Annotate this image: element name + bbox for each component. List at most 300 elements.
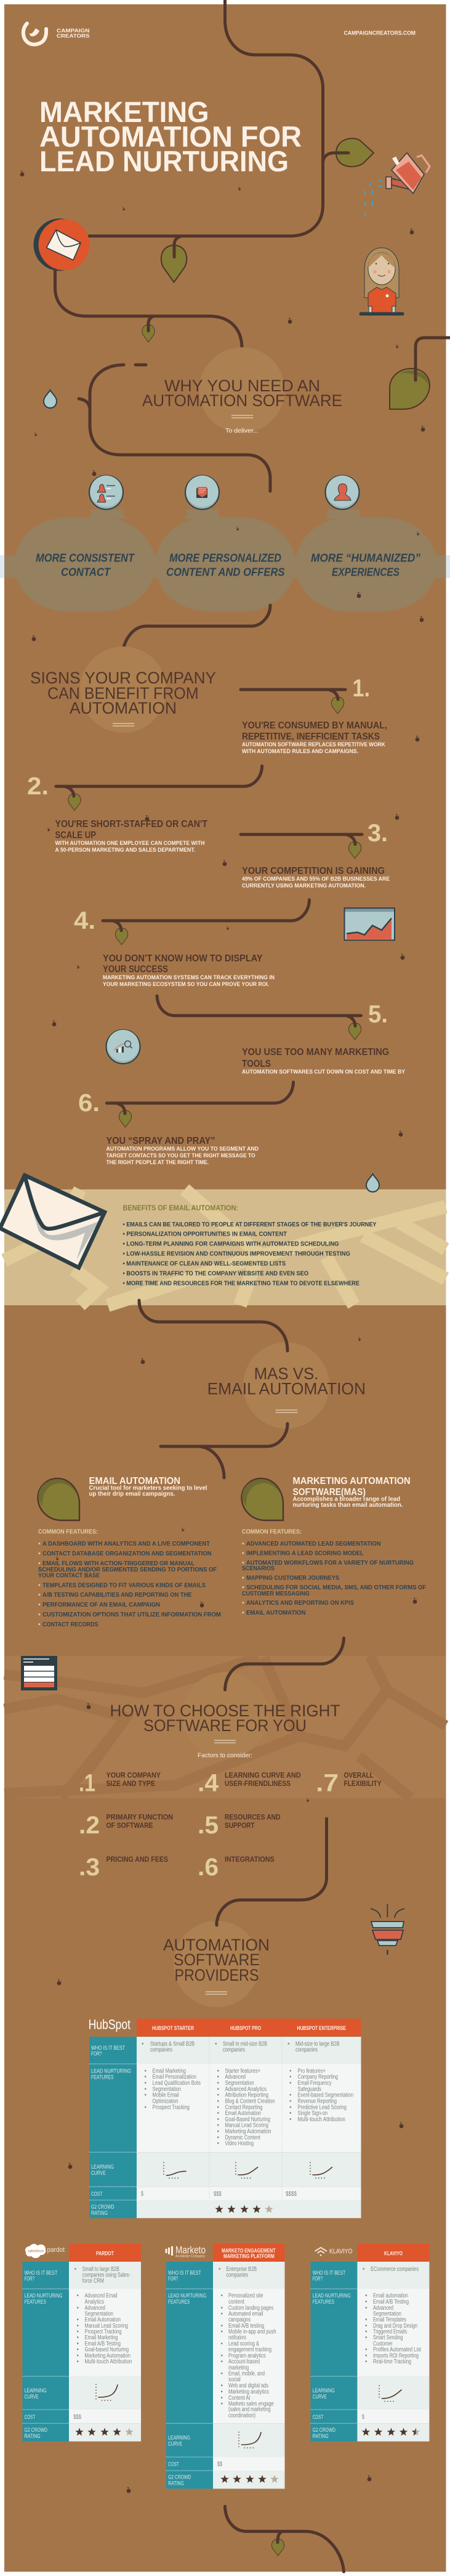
feature list: •	[38, 1560, 41, 1567]
cell text: Customer	[373, 2341, 393, 2347]
sign text: YOU “SPRAY AND PRAY”	[106, 1136, 215, 1146]
vine	[217, 1819, 326, 1926]
section: why you need an automation software	[0, 338, 450, 655]
row labels: WHO IS IT BEST	[313, 2270, 345, 2276]
cell text: Manual Lead Scoring	[85, 2323, 128, 2329]
row labels: G2 CROWD	[91, 2204, 115, 2211]
cell text: companies	[226, 2272, 248, 2278]
factor 7: OVERALL	[344, 1771, 374, 1779]
feature list: YOUR CONTACT BASE	[38, 1572, 100, 1579]
column: HubSpot Pro: •	[217, 2098, 219, 2105]
title: MARKETING	[39, 96, 209, 129]
icon: leaf	[38, 1478, 79, 1520]
factor 1	[79, 1770, 161, 1797]
column: HubSpot Enterprise	[286, 2040, 353, 2198]
benefits list: • BOOSTS IN TRAFFIC TO THE COMPANY WEBSITE AND EVEN SEO	[123, 1270, 308, 1278]
column: HubSpot Pro: •	[217, 2140, 219, 2147]
sign text: AUTOMATION SOFTWARE REPLACES REPETITIVE WORK	[242, 741, 385, 748]
logo wordmark: CREATORS	[57, 33, 90, 39]
cell text: Marketo sales engage	[228, 2400, 274, 2407]
vine: upper	[139, 1300, 287, 1351]
sign text: YOU USE TOO MANY MARKETING	[242, 1047, 389, 1058]
logo: Klaviyo: KLAVIYO	[329, 2248, 353, 2256]
column heading and description	[89, 1476, 207, 1498]
column: HubSpot Starter: •	[144, 2104, 147, 2111]
column: HubSpot Pro: Segmentation	[225, 2080, 254, 2087]
row labels: G2 CROWD	[313, 2427, 335, 2434]
feature list	[242, 1540, 427, 1616]
row labels: WHO IS IT BEST	[168, 2270, 201, 2276]
cell text: Prospect Tracking	[85, 2329, 122, 2336]
card text: MORE CONSISTENT	[36, 552, 135, 565]
benefits list: • EMAILS CAN BE TAILORED TO PEOPLE AT DIFFERENT STAGES OF THE BUYER'S JOURNEY	[123, 1221, 377, 1228]
feature list: A DASHBOARD WITH ANALYTICS AND A LIVE COMPONENT	[42, 1540, 211, 1547]
row labels: LEARNING	[313, 2387, 335, 2394]
column: HubSpot Pro: Starter features+	[225, 2068, 260, 2074]
cell text: •	[220, 2395, 223, 2402]
row labels: WHO IS IT BEST	[25, 2270, 57, 2276]
heading: HOW TO CHOOSE THE RIGHT	[110, 1702, 340, 1720]
cell text: ECommerce companies	[371, 2266, 419, 2273]
learning curve	[379, 2386, 401, 2401]
logo: Salesforce Pardot: salesforce	[28, 2249, 44, 2253]
cell text: •	[76, 2305, 79, 2312]
logo wordmark	[57, 27, 90, 39]
benefits list: • LOW-HASSLE REVISION AND CONTINUOUS IMPROVEMENT THROUGH TESTING	[123, 1250, 350, 1258]
row labels: FOR?	[91, 2050, 102, 2057]
factor 5: SUPPORT	[225, 1821, 255, 1830]
benefits heading: BENEFITS OF EMAIL AUTOMATION:	[123, 1205, 238, 1212]
cell text: •	[220, 2329, 223, 2336]
cell text: marketing	[228, 2365, 249, 2371]
feature list: SCENARIOS	[242, 1565, 275, 1572]
column: HubSpot Starter: •	[144, 2086, 147, 2093]
cell text: •	[76, 2334, 79, 2341]
column: HubSpot Starter: Startups & Small B2B	[150, 2040, 195, 2047]
icon: water drop	[366, 1174, 379, 1192]
cell text: Email Marketing	[85, 2334, 118, 2341]
column: HubSpot Enterprise: •	[289, 2068, 292, 2074]
column heading and description: Crucial tool for marketers seeking to level	[89, 1484, 207, 1491]
factor 5	[198, 1812, 281, 1839]
column: HubSpot Pro: Email Automation	[225, 2110, 261, 2117]
header	[213, 2244, 284, 2262]
column: HubSpot Starter	[141, 2040, 201, 2198]
common features heading: COMMON FEATURES:	[38, 1528, 98, 1536]
branch and leaf	[241, 690, 345, 714]
card text: EXPERIENCES	[332, 565, 400, 578]
row labels: LEARNING	[91, 2164, 114, 2170]
cell text: •	[365, 2299, 368, 2305]
sign text: WITH AUTOMATED RULES AND CAMPAIGNS.	[242, 748, 358, 755]
cell text: Profiles Automated List	[373, 2347, 421, 2354]
factor 6: .6	[198, 1854, 219, 1881]
heading circle	[80, 646, 166, 733]
cell text: Advanced	[373, 2305, 393, 2312]
header row: HUBSPOT PRO	[230, 2025, 261, 2032]
column heading and description: SOFTWARE(MAS)	[293, 1487, 366, 1498]
star rating	[75, 2428, 134, 2435]
column: HubSpot Starter: •	[144, 2068, 147, 2074]
cell text: •	[220, 2389, 223, 2395]
number 6: 6.	[78, 1090, 100, 1117]
cell text: Mobile in-app and push	[228, 2329, 276, 2336]
sign text: YOU'RE SHORT-STAFFED OR CAN'T	[55, 819, 207, 829]
number 5: 5.	[368, 1001, 388, 1028]
sign text: YOUR COMPETITION IS GAINING	[242, 866, 385, 876]
sign 4	[74, 900, 395, 988]
row labels: RATING	[25, 2433, 41, 2440]
column: HubSpot Starter: Lead Qualification Bots	[153, 2080, 201, 2087]
header	[69, 2244, 141, 2262]
column: HubSpot Starter: •	[142, 2040, 144, 2047]
learning curve	[96, 2384, 118, 2400]
column: HubSpot Enterprise: $$$$	[286, 2191, 297, 2198]
row labels	[91, 2045, 131, 2217]
cell text: •	[76, 2353, 79, 2360]
cell text: Custom landing pages	[228, 2305, 273, 2312]
column: HubSpot Starter: $	[141, 2191, 143, 2198]
column: HubSpot Pro: •	[217, 2129, 219, 2135]
heading	[30, 669, 216, 717]
factor 6: INTEGRATIONS	[225, 1855, 275, 1864]
column heading and description: MARKETING AUTOMATION	[293, 1476, 411, 1486]
heading: AUTOMATION SOFTWARE	[142, 391, 342, 410]
star rating	[362, 2428, 420, 2435]
sign text: YOU DON'T KNOW HOW TO DISPLAY	[103, 953, 263, 964]
factor 3: PRICING AND FEES	[106, 1855, 168, 1864]
vine: bottom with leaf	[225, 2506, 344, 2572]
cell text: Small to large B2B	[82, 2266, 119, 2273]
row labels: RATING	[91, 2210, 108, 2217]
factor 3: .3	[79, 1854, 100, 1881]
cell text: Advanced	[85, 2305, 105, 2312]
feature list: CONTACT RECORDS	[42, 1621, 98, 1628]
icon: leaf pointing down	[161, 236, 187, 282]
cell text: Email A/B Testing	[85, 2341, 121, 2347]
column: HubSpot Enterprise: •	[289, 2074, 292, 2081]
sign text: A 50-PERSON MARKETING AND SALES DEPARTMENT.	[55, 847, 195, 854]
sign text: AUTOMATION SOFTWARES CUT DOWN ON COST AND TIME BY	[242, 1069, 406, 1075]
column: HubSpot Enterprise: •	[289, 2104, 292, 2111]
feature list: •	[38, 1611, 41, 1618]
cell text: $	[362, 2414, 364, 2421]
cell text: •	[365, 2293, 368, 2299]
cell text: Personalized site	[228, 2293, 263, 2299]
sign 3	[241, 820, 390, 889]
section: automation software providers	[22, 1921, 429, 2488]
subheading: Factors to consider:	[198, 1752, 252, 1759]
section: how to choose the right software	[4, 1638, 446, 1955]
branch and leaf	[106, 1082, 293, 1127]
subheading: To deliver...	[225, 427, 259, 434]
column: email automation	[38, 1476, 221, 1628]
row labels: RATING	[313, 2433, 329, 2440]
cell text	[73, 2266, 132, 2421]
column: HubSpot Starter: Email Personalization	[153, 2074, 196, 2081]
column: HubSpot Enterprise: Single Sign-on	[298, 2110, 327, 2117]
feature list: •	[242, 1584, 244, 1591]
cell text: •	[365, 2358, 368, 2365]
logo wordmark: CAMPAIGN	[57, 27, 90, 33]
feature list: IMPLEMENTING A LEAD SCORING MODEL	[246, 1549, 364, 1557]
row backgrounds	[22, 2262, 141, 2442]
sign text: AUTOMATION PROGRAMS ALLOW YOU TO SEGMENT AND	[106, 1146, 259, 1152]
card text: MORE “HUMANIZED”	[311, 552, 421, 565]
column: HubSpot Enterprise: •	[289, 2098, 292, 2105]
panel: benefits of email automation	[0, 1174, 446, 1305]
heading: SOFTWARE FOR YOU	[143, 1716, 307, 1735]
heading: PROVIDERS	[175, 1966, 259, 1984]
cell text: Email, mobile, and	[228, 2370, 265, 2378]
number 2: 2.	[27, 773, 49, 800]
column: HubSpot Enterprise: •	[287, 2040, 290, 2047]
row labels: CURVE	[168, 2440, 182, 2448]
column: HubSpot Pro: •	[217, 2122, 219, 2129]
row labels: FEATURES	[168, 2299, 190, 2305]
row labels: LEARNING	[25, 2387, 47, 2394]
card text	[311, 552, 421, 578]
feature list: EMAIL FLOWS WITH ACTION-TRIGGERED OR MANUAL	[42, 1560, 195, 1567]
heading	[163, 1936, 270, 1984]
sign text: WITH AUTOMATION ONE EMPLOYEE CAN COMPETE WITH	[55, 840, 205, 847]
branch and leaf	[56, 766, 262, 810]
row labels: COST	[91, 2191, 103, 2198]
cell text: •	[76, 2293, 79, 2299]
feature list: •	[242, 1599, 244, 1607]
cell text: •	[220, 2358, 223, 2365]
row labels: COST	[168, 2461, 179, 2468]
column: HubSpot Pro: •	[217, 2116, 219, 2123]
cell text: •	[76, 2341, 79, 2347]
cell text: •	[220, 2323, 223, 2329]
icon: leaf pointing right	[323, 139, 374, 166]
icon: analytics magnifier	[106, 1030, 140, 1064]
heading: SIGNS YOUR COMPANY	[30, 669, 216, 687]
factor 4: USER-FRIENDLINESS	[225, 1779, 291, 1788]
column: HubSpot Enterprise: •	[289, 2110, 292, 2117]
cell text: •	[220, 2382, 223, 2389]
feature list: A/B TESTING CAPABILITIES AND REPORTING ON THE	[42, 1591, 191, 1599]
feature list: SCHEDULING AND/OR SEGMENTED SENDING TO PORTIONS OF	[38, 1566, 217, 1573]
cell text: •	[76, 2317, 79, 2323]
column: HubSpot Starter: Segmentation	[153, 2086, 181, 2093]
column: HubSpot Pro: •	[217, 2068, 219, 2074]
feature list: SCHEDULING FOR SOCIAL MEDIA, SMS, AND OTHER FORMS OF	[246, 1584, 427, 1591]
feature list: •	[242, 1549, 244, 1557]
benefits list	[123, 1221, 377, 1287]
cell text: Segmentation	[85, 2310, 113, 2317]
row labels: FEATURES	[313, 2299, 334, 2305]
column: HubSpot Pro: •	[217, 2104, 219, 2111]
cell text: Analytics	[85, 2299, 104, 2305]
factor 1: .1	[79, 1770, 95, 1797]
heading: AUTOMATION	[70, 699, 177, 717]
vine: lower	[161, 1424, 287, 1478]
heading circle	[243, 1342, 329, 1429]
cell text: •	[365, 2305, 368, 2312]
row labels: CURVE	[313, 2394, 327, 2400]
feature list: EMAIL AUTOMATION	[246, 1609, 305, 1616]
row labels: FEATURES	[91, 2074, 114, 2081]
heading	[142, 377, 342, 410]
row labels: FOR?	[25, 2276, 34, 2283]
card: more consistent contact	[14, 476, 155, 611]
header: KLAVIYO	[384, 2251, 403, 2257]
star rating	[215, 2205, 273, 2213]
cell text: •	[76, 2358, 79, 2365]
cell text: •	[220, 2305, 223, 2312]
feature list: •	[38, 1621, 41, 1628]
header row: HUBSPOT ENTERPRISE	[297, 2025, 346, 2032]
title: AUTOMATION FOR	[39, 121, 302, 153]
table: Klaviyo	[310, 2244, 429, 2442]
icon: big leaf right	[390, 338, 450, 409]
cell text: Email Automation	[85, 2317, 121, 2323]
icon: signup form	[21, 1656, 57, 1690]
cell text: •	[76, 2347, 79, 2354]
sign text: YOU'RE CONSUMED BY MANUAL,	[242, 720, 387, 731]
cell text: •	[365, 2317, 368, 2323]
veined background	[4, 1656, 446, 1798]
row labels: RATING	[168, 2480, 184, 2487]
feature list: •	[38, 1591, 41, 1599]
row labels: COST	[313, 2414, 324, 2421]
column: HubSpot Pro: Advanced Analytics	[225, 2086, 267, 2093]
sign 5	[106, 996, 406, 1075]
row labels	[313, 2270, 351, 2440]
header: PARDOT	[96, 2251, 114, 2257]
column heading and description: Accomplishes a broader range of lead	[293, 1496, 400, 1503]
row backgrounds	[166, 2262, 284, 2488]
feature list: AUTOMATED WORKFLOWS FOR A VARIETY OF NURTURING	[246, 1559, 414, 1567]
heading circle	[182, 1672, 268, 1758]
card shape	[14, 510, 155, 611]
icon: funnel	[371, 1904, 404, 1955]
feature list: MAPPING CUSTOMER JOURNEYS	[246, 1575, 339, 1582]
cell text: Email A/B Testing	[373, 2299, 409, 2305]
icon: Campaign Creators logo	[23, 23, 46, 44]
benefits list: • MORE TIME AND RESOURCES FOR THE MARKETING TEAM TO DEVOTE ELSEWHERE	[123, 1280, 360, 1287]
cell text: •	[76, 2323, 79, 2329]
number 4: 4.	[74, 907, 95, 934]
panel background with veins	[4, 1189, 446, 1305]
card text: CONTACT	[61, 565, 111, 578]
column: HubSpot Starter: Optimization	[153, 2098, 179, 2105]
column: HubSpot Pro: •	[217, 2086, 219, 2093]
feature list: •	[242, 1559, 244, 1567]
logo: Klaviyo	[315, 2248, 353, 2256]
cell text: Goal-based Nurturing	[85, 2347, 129, 2354]
cell text: •	[365, 2347, 368, 2354]
cell text: Lead scoring &	[228, 2341, 259, 2347]
column heading and description: nurturing tasks than email automation.	[293, 1501, 403, 1509]
cell text: Marketing Automation	[85, 2353, 131, 2360]
row backgrounds	[310, 2262, 429, 2442]
cell text: Program analytics	[228, 2353, 266, 2360]
column: HubSpot Enterprise: •	[289, 2080, 292, 2087]
column: HubSpot Pro: •	[217, 2092, 219, 2099]
cell text: •	[365, 2334, 368, 2341]
header: MARKETING PLATFORM	[223, 2253, 275, 2260]
card text: CONTENT AND OFFERS	[166, 565, 285, 578]
heading: SOFTWARE	[174, 1950, 260, 1969]
section: signs your company can benefit	[27, 646, 406, 1166]
cell text: Drag and Drop Design	[373, 2323, 417, 2329]
column: HubSpot Starter: companies	[150, 2047, 172, 2053]
heading: WHY YOU NEED AN	[164, 377, 320, 395]
feature list: CUSTOMER MESSAGING	[242, 1590, 310, 1597]
logo: Marketo: An Adobe Company	[175, 2254, 205, 2258]
cell text: •	[365, 2353, 368, 2360]
column: HubSpot Pro: companies	[223, 2047, 245, 2053]
logo: Marketo: Marketo	[175, 2244, 206, 2256]
sign text	[103, 953, 275, 988]
factor 2: PRIMARY FUNCTION	[106, 1813, 173, 1822]
row labels: LEAD NURTURING	[25, 2293, 63, 2299]
icon: watering can	[386, 153, 430, 194]
logo: HubSpot: HubSpot	[89, 2016, 131, 2032]
column: HubSpot Pro: Marketing Automation	[225, 2129, 271, 2135]
factor 5: RESOURCES AND	[225, 1813, 281, 1822]
column: HubSpot Enterprise: Email Frequency	[298, 2080, 331, 2087]
cell text: Enterprise B2B	[226, 2266, 257, 2273]
row labels: CURVE	[25, 2394, 39, 2400]
sign 2	[27, 766, 262, 854]
column: HubSpot Enterprise: Mid-size to large B2B	[295, 2040, 340, 2047]
feature list: PERFORMANCE OF AN EMAIL CAMPAIGN	[42, 1601, 160, 1608]
sign text	[242, 720, 387, 755]
cell text: companies using Sales-	[82, 2272, 131, 2278]
column: HubSpot Pro: Goal-Based Nurturing	[225, 2116, 270, 2123]
factor 5: .5	[198, 1812, 219, 1839]
cell text: Advanced Email	[85, 2293, 117, 2299]
feature list: •	[242, 1540, 244, 1547]
column: HubSpot Pro: •	[217, 2110, 219, 2117]
vine: left loop	[79, 365, 270, 491]
row labels: FOR?	[313, 2276, 323, 2283]
cell text: Web and digital ads	[228, 2382, 268, 2389]
row labels: G2 CROWD	[25, 2427, 47, 2434]
header row	[137, 2019, 361, 2036]
band behind cards	[0, 555, 450, 578]
row labels: CURVE	[91, 2170, 106, 2177]
sign 6	[78, 1082, 293, 1166]
column: HubSpot Enterprise: Multi-touch Attribution	[298, 2116, 345, 2123]
column: HubSpot Enterprise: companies	[295, 2047, 318, 2053]
cell text: •	[365, 2323, 368, 2329]
cell text: Segmentation	[373, 2310, 401, 2317]
cell text: engagement tracking	[228, 2347, 271, 2354]
sign text: REPETITIVE, INEFFICIENT TASKS	[242, 732, 380, 742]
heading: EMAIL AUTOMATION	[207, 1380, 366, 1398]
column: HubSpot Enterprise: Predictive Lead Scoring	[298, 2104, 347, 2111]
icon: small leaf	[142, 316, 155, 342]
column: HubSpot Enterprise: •	[289, 2092, 292, 2099]
section: MAS vs email automation	[38, 1300, 427, 1628]
cell text: •	[220, 2310, 223, 2317]
factor 4	[198, 1770, 301, 1797]
column: HubSpot Starter: Email Marketing	[153, 2068, 186, 2074]
sign text	[106, 1136, 259, 1166]
cell text: •	[219, 2266, 221, 2273]
column: HubSpot Pro: •	[217, 2074, 219, 2081]
cell text	[362, 2266, 421, 2421]
cell text: •	[220, 2341, 223, 2347]
sign text: MARKETING AUTOMATION SYSTEMS CAN TRACK EVERYTHING IN	[103, 974, 275, 981]
learning curve	[239, 2432, 261, 2448]
sign text: 49% OF COMPANIES AND 55% OF B2B BUSINESSES ARE	[242, 876, 390, 882]
